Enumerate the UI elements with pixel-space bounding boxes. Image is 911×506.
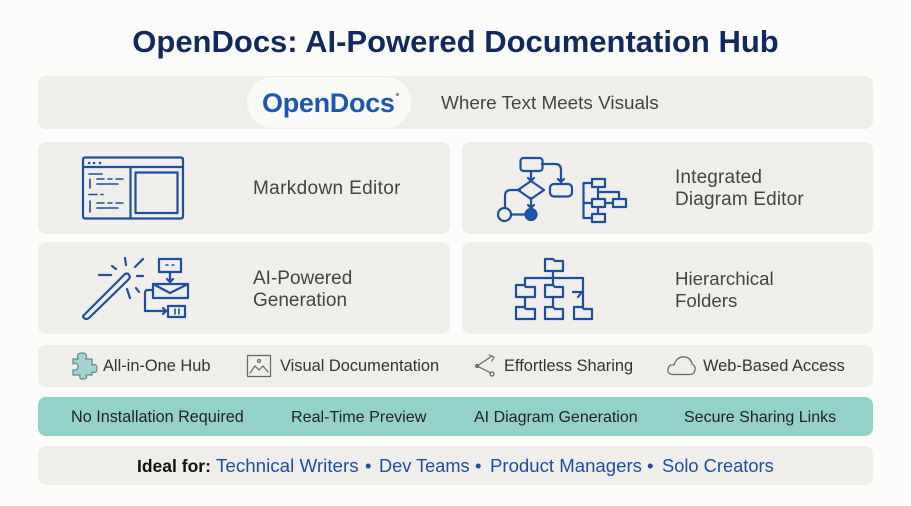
all-in-one hub label: All-in-One Hub [103, 357, 210, 375]
integrated diagram editor label: Integrated [675, 167, 762, 188]
audience line: Product Managers [490, 455, 642, 476]
panel: ai-powered generation [38, 242, 450, 334]
no installation label: No Installation Required [71, 408, 244, 426]
real-time preview label: Real-Time Preview [291, 408, 426, 426]
panel: markdown editor [38, 142, 450, 234]
integrated diagram editor label: Diagram Editor [675, 189, 804, 210]
effortless sharing label: Effortless Sharing [504, 357, 633, 375]
audience line: • [475, 455, 482, 476]
audience line: Solo Creators [662, 455, 774, 476]
hierarchical folders label [675, 268, 774, 311]
audience line [137, 455, 774, 476]
logo registered mark [396, 93, 399, 96]
panel: audience strip [38, 446, 873, 485]
logo text: OpenDocs [262, 88, 395, 118]
ai-powered generation label: AI-Powered [253, 268, 352, 289]
audience line: • [647, 455, 654, 476]
hierarchical folders label: Hierarchical [675, 268, 774, 289]
panel: benefits strip [38, 345, 873, 387]
title: OpenDocs: AI-Powered Documentation Hub [132, 24, 779, 59]
panel: brand banner [38, 76, 873, 129]
tagline: Where Text Meets Visuals [441, 93, 659, 114]
integrated diagram editor label [675, 167, 804, 210]
panel: integrated diagram editor [462, 142, 873, 234]
ai-powered generation label [253, 268, 352, 310]
ai-powered generation label: Generation [253, 290, 347, 310]
visual documentation label: Visual Documentation [280, 357, 439, 375]
audience line: Ideal for: [137, 456, 211, 476]
markdown editor label: Markdown Editor [253, 178, 401, 199]
web-based access label: Web-Based Access [703, 357, 845, 375]
audience line: Dev Teams [379, 456, 470, 476]
audience line: • [365, 455, 372, 476]
audience line: Technical Writers [216, 455, 359, 476]
panel: feature strip [38, 397, 873, 436]
hierarchical folders label: Folders [675, 290, 737, 311]
panel: hierarchical folders [462, 242, 873, 334]
ai diagram generation label: AI Diagram Generation [474, 409, 638, 426]
secure sharing label: Secure Sharing Links [684, 409, 836, 426]
logo pill [247, 77, 411, 128]
